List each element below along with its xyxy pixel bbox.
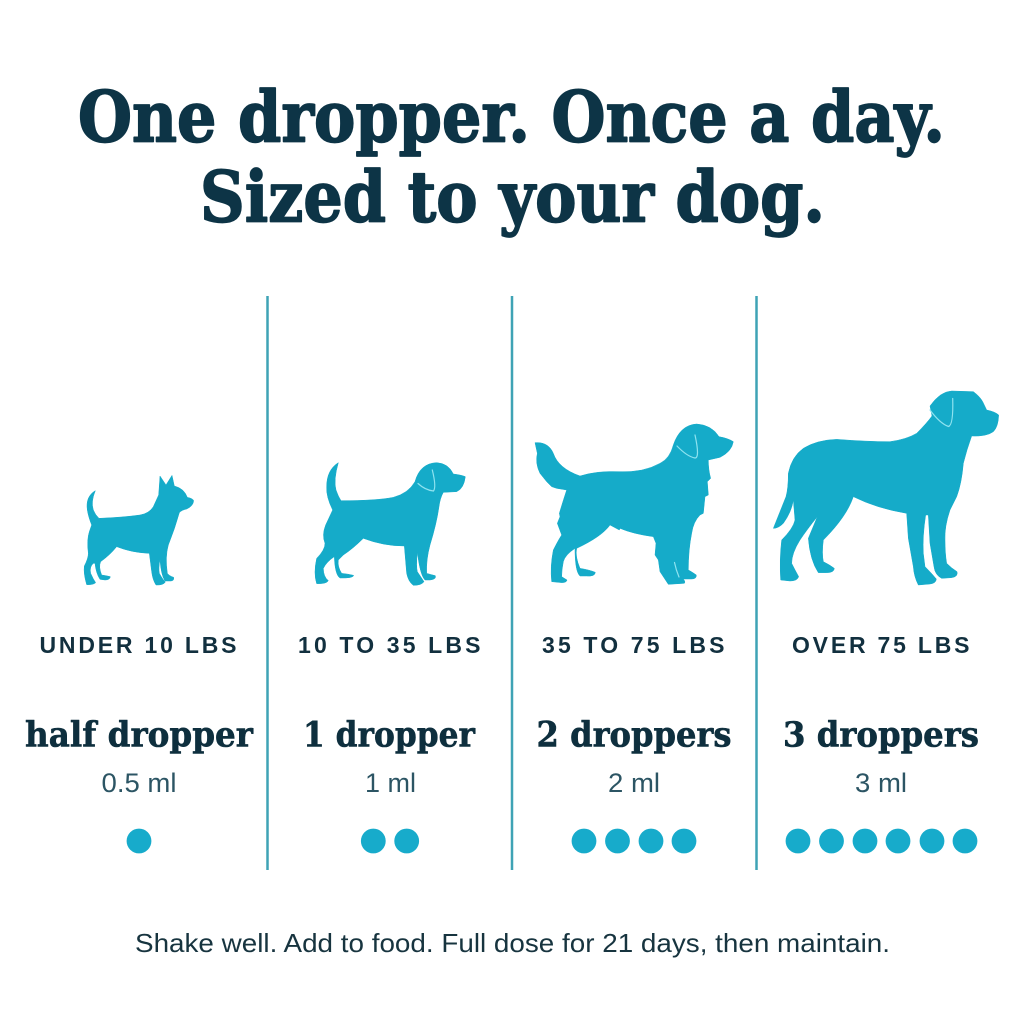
icon: fluffy dog silhouette: [535, 424, 733, 584]
footer note: Shake well. Add to food. Full dose for 21 days, then maintain.: [135, 928, 890, 958]
dose dots: [127, 829, 151, 853]
panel: 35 to 75 lbs: [535, 424, 733, 853]
title: Sized to your dog.: [200, 156, 825, 238]
weight label: OVER 75 LBS: [792, 632, 970, 658]
weight label: UNDER 10 LBS: [40, 632, 236, 658]
panel: under 10 lbs: [25, 475, 254, 853]
dose: 2 droppers: [536, 714, 732, 756]
dose: 3 droppers: [783, 714, 979, 756]
millilitres: 2 ml: [608, 768, 660, 798]
millilitres: 3 ml: [855, 768, 907, 798]
icon: large dog silhouette: [773, 391, 999, 585]
dose: 1 dropper: [303, 714, 475, 756]
panel: over 75 lbs: [773, 391, 999, 853]
title: [78, 76, 945, 238]
dose: half dropper: [25, 714, 254, 756]
icon: medium dog silhouette: [315, 463, 465, 585]
weight label: 35 TO 75 LBS: [542, 632, 724, 658]
millilitres: 1 ml: [365, 768, 416, 798]
dose dots: [572, 829, 696, 853]
dose dots: [361, 829, 419, 853]
panel: 10 to 35 lbs: [298, 463, 480, 853]
dose dots: [786, 829, 977, 853]
weight label: 10 TO 35 LBS: [298, 632, 480, 658]
millilitres: 0.5 ml: [102, 768, 176, 798]
icon: small dog silhouette: [84, 475, 194, 585]
